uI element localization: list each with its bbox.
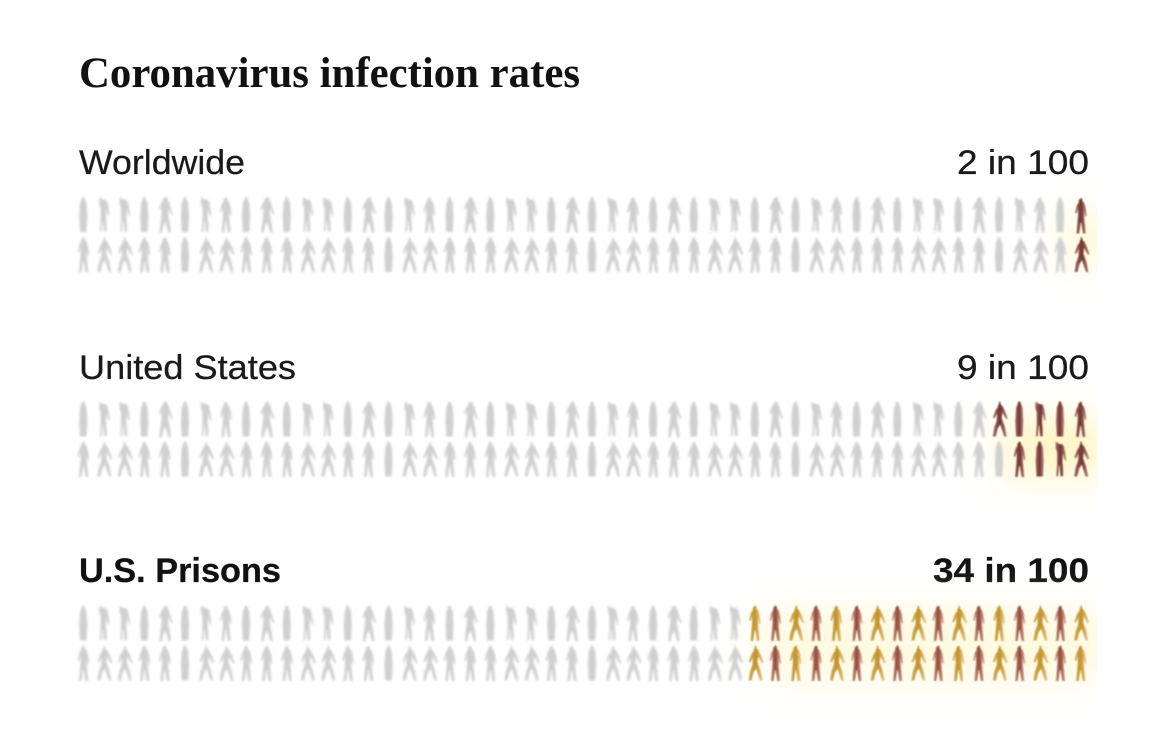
glow: prisons highlight (760, 610, 1110, 680)
label: Worldwide: Worldwide (79, 144, 245, 182)
value: 9 in 100: 9 in 100 (957, 349, 1089, 387)
value: 2 in 100: 2 in 100 (957, 144, 1089, 182)
glow: United States highlight (1005, 420, 1110, 475)
figures: prisons infected (749, 606, 1089, 681)
panel: United States (78, 349, 1110, 477)
panel: worldwide (78, 144, 1115, 272)
figures: worldwide infected (1074, 198, 1090, 272)
figures: United States infected (993, 402, 1089, 477)
panel: U.S. Prisons (78, 552, 1110, 681)
label: U.S. Prisons: U.S. Prisons (79, 552, 281, 590)
figures: United States uninfected (78, 402, 1089, 477)
glow: worldwide highlight (1065, 215, 1115, 265)
figures: worldwide uninfected (78, 197, 1089, 272)
label: United States: United States (79, 349, 296, 387)
figures: prisons uninfected (77, 605, 744, 682)
title: Coronavirus infection rates (79, 50, 580, 97)
value: 34 in 100: 34 in 100 (933, 552, 1089, 590)
